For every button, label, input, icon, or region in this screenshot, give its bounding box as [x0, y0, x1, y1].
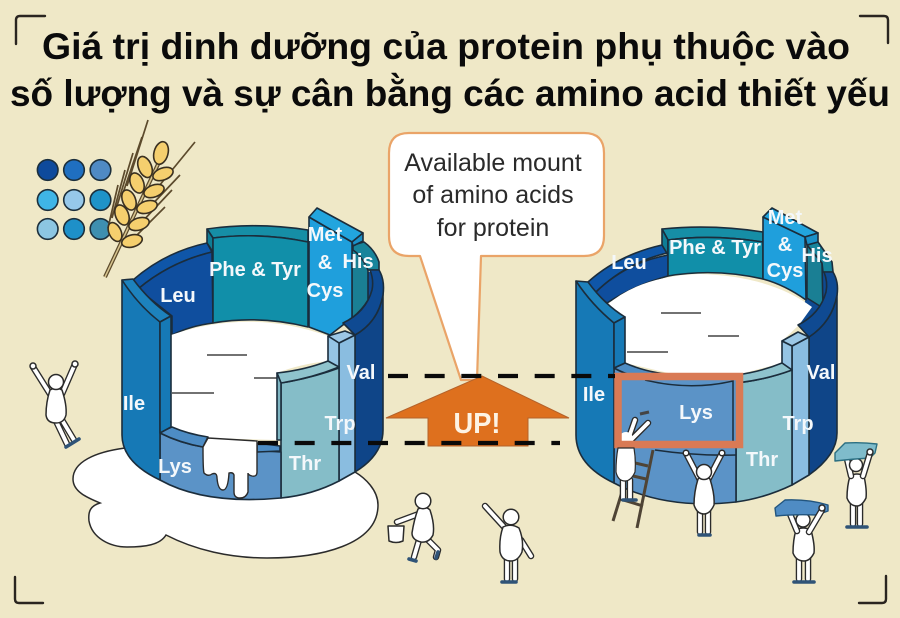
figure: person carrying teal block	[835, 443, 877, 527]
amino acid labels: Val	[347, 362, 375, 384]
milk surface	[607, 274, 812, 375]
figure: person carrying bucket	[388, 493, 438, 561]
amino acid labels: Ile	[123, 393, 145, 415]
inner wall shadow	[343, 272, 378, 336]
back stave: Leu	[133, 243, 213, 335]
right barrel outer labels: Val	[807, 362, 835, 384]
ladder and painter body	[613, 448, 653, 528]
right barrel outer labels: Phe & Tyr	[669, 237, 761, 259]
right barrel outer labels: Met	[768, 207, 803, 229]
stave: Val	[798, 272, 838, 475]
figure: cheering person	[30, 361, 79, 447]
highlighted Lys raised section	[618, 376, 740, 446]
back stave: His	[352, 242, 379, 318]
teal block	[835, 443, 877, 461]
right barrel outer labels: Trp	[782, 413, 814, 435]
amino acid labels	[123, 224, 375, 478]
back stave: Met and Cys	[763, 208, 818, 300]
figure: person reaching up	[683, 450, 725, 535]
inner wall shadow	[798, 272, 834, 338]
left barrel	[122, 208, 384, 500]
right barrel outer labels	[583, 207, 835, 471]
right barrel outer labels: His	[801, 245, 833, 267]
arrow: UP	[386, 376, 569, 446]
back stave: Leu	[588, 245, 668, 303]
title: Giá trị dinh dưỡng của protein phụ thuộc vào	[42, 26, 850, 67]
stave: Ile	[576, 281, 625, 483]
title	[10, 26, 890, 114]
stave: Val	[343, 270, 384, 472]
surface ripple lines	[172, 355, 277, 393]
milk surface	[171, 322, 328, 440]
callout: of amino acids	[412, 181, 574, 209]
right barrel outer labels: Cys	[767, 260, 803, 282]
blue block	[775, 500, 828, 516]
arrow: UP: UP!	[454, 408, 500, 440]
callout: for protein	[437, 214, 549, 242]
amino acid labels: &	[318, 252, 332, 274]
back stave: Phe and Tyr	[662, 227, 763, 279]
right barrel	[576, 208, 838, 504]
amino acid labels: Thr	[289, 453, 321, 475]
amino acid colour dots	[37, 160, 111, 239]
amino acid labels: His	[342, 251, 374, 273]
right barrel outer labels: &	[778, 234, 792, 256]
highlighted Lys raised section: Lys	[679, 402, 713, 424]
figure: person carrying blue block	[775, 500, 828, 582]
stave: Trp	[782, 332, 809, 485]
stave: Trp	[328, 331, 355, 481]
right barrel outer labels: Leu	[611, 252, 647, 274]
figure: person pointing	[485, 506, 531, 582]
icon: wheat	[105, 120, 195, 277]
amino acid labels: Met	[308, 224, 343, 246]
stave: Lys	[614, 363, 736, 504]
right barrel outer labels: Ile	[583, 384, 605, 406]
amino acid labels: Trp	[324, 413, 356, 435]
right barrel outer labels: Thr	[746, 449, 778, 471]
stave: Thr	[736, 363, 792, 502]
dashed level lines	[258, 376, 615, 443]
milk pouring through the gap	[203, 438, 257, 498]
amino acid labels: Lys	[158, 456, 192, 478]
surface ripple lines	[627, 313, 739, 352]
amino acid labels: Cys	[307, 280, 343, 302]
stave: Thr	[277, 361, 339, 498]
amino acid labels: Leu	[160, 285, 196, 307]
back stave: Met and Cys	[309, 208, 363, 335]
amino acid labels: Phe & Tyr	[209, 259, 301, 281]
back stave: His	[807, 242, 833, 308]
back stave: Phe and Tyr	[207, 226, 308, 327]
title: số lượng và sự cân bằng các amino acid thiết yếu	[10, 72, 890, 114]
callout	[389, 133, 604, 380]
stave: Ile	[122, 279, 171, 480]
callout: Available mount	[404, 149, 582, 177]
stave: Lys	[160, 427, 281, 500]
milk spill	[73, 448, 378, 558]
